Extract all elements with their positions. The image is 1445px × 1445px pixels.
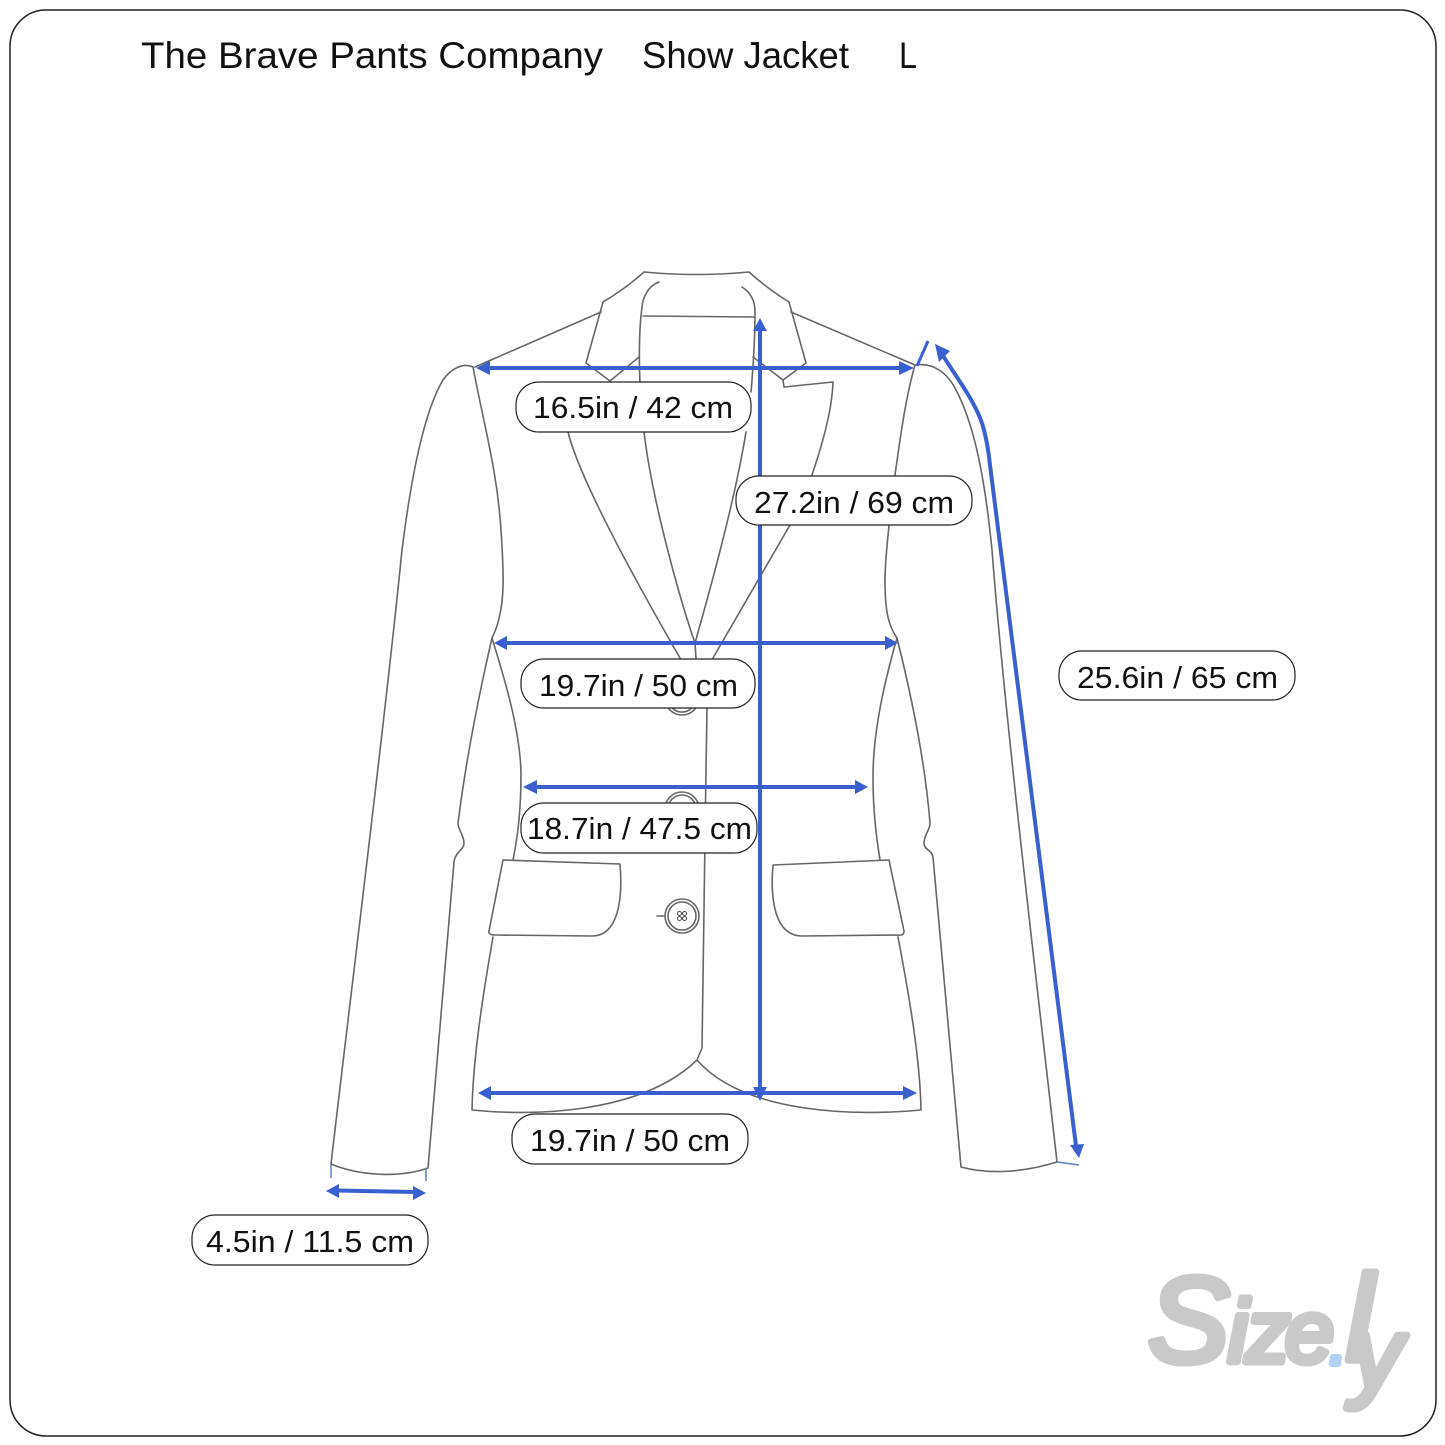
button middle <box>665 792 699 826</box>
jacket line drawing <box>331 272 1057 1174</box>
front edge <box>697 708 707 1060</box>
title: Show Jacket <box>642 35 850 76</box>
inner neck <box>639 282 755 392</box>
arrow: sleeve length <box>917 341 1084 1165</box>
arrow: shoulder width <box>476 361 914 375</box>
right pocket flap <box>772 860 904 936</box>
title: The Brave Pants Company <box>141 35 604 76</box>
label: chest width: 19.7in / 50 cm <box>539 668 738 703</box>
logo: Size.ly: S <box>1148 1252 1229 1388</box>
logo: Size.ly: . <box>1329 1304 1347 1378</box>
title <box>141 35 917 76</box>
label: cuff width <box>192 1215 428 1265</box>
right armhole and side <box>697 365 921 1112</box>
left pocket flap <box>489 860 621 936</box>
label: hem width <box>512 1114 748 1164</box>
logo: Size.ly: z <box>1245 1282 1290 1381</box>
label: waist width: 18.7in / 47.5 cm <box>527 811 752 846</box>
logo: Size.ly: y <box>1346 1298 1408 1410</box>
arrow: chest width <box>494 636 898 650</box>
label: total length <box>736 476 972 525</box>
arrow: waist width <box>523 780 868 794</box>
label: waist width <box>521 803 757 853</box>
arrow: hem width <box>478 1086 917 1100</box>
label: shoulder width: 16.5in / 42 cm <box>533 390 733 425</box>
lapel inner edges <box>568 432 746 658</box>
left sleeve <box>331 365 492 1174</box>
label: sleeve length <box>1059 651 1295 700</box>
label: hem width: 19.7in / 50 cm <box>530 1123 730 1158</box>
right lapel <box>713 380 833 658</box>
label: chest width <box>521 659 755 708</box>
label: total length: 27.2in / 69 cm <box>754 485 954 520</box>
logo: Size.ly: e <box>1285 1282 1334 1381</box>
button top <box>665 681 699 715</box>
right sleeve <box>897 365 1057 1172</box>
collar <box>586 272 806 381</box>
arrow: total length vertical <box>753 318 767 1101</box>
button bottom <box>657 899 699 933</box>
arrow: cuff width <box>326 1165 426 1200</box>
title: L <box>899 35 917 76</box>
logo: Size.ly <box>1148 1250 1408 1410</box>
shoulders <box>475 312 915 367</box>
logo: Size.ly: i <box>1228 1282 1250 1381</box>
left armhole and side <box>472 367 697 1112</box>
label: cuff width: 4.5in / 11.5 cm <box>206 1224 414 1259</box>
logo: Size.ly: l <box>1346 1250 1376 1386</box>
label: shoulder width <box>516 382 751 432</box>
label: sleeve length: 25.6in / 65 cm <box>1077 660 1278 695</box>
